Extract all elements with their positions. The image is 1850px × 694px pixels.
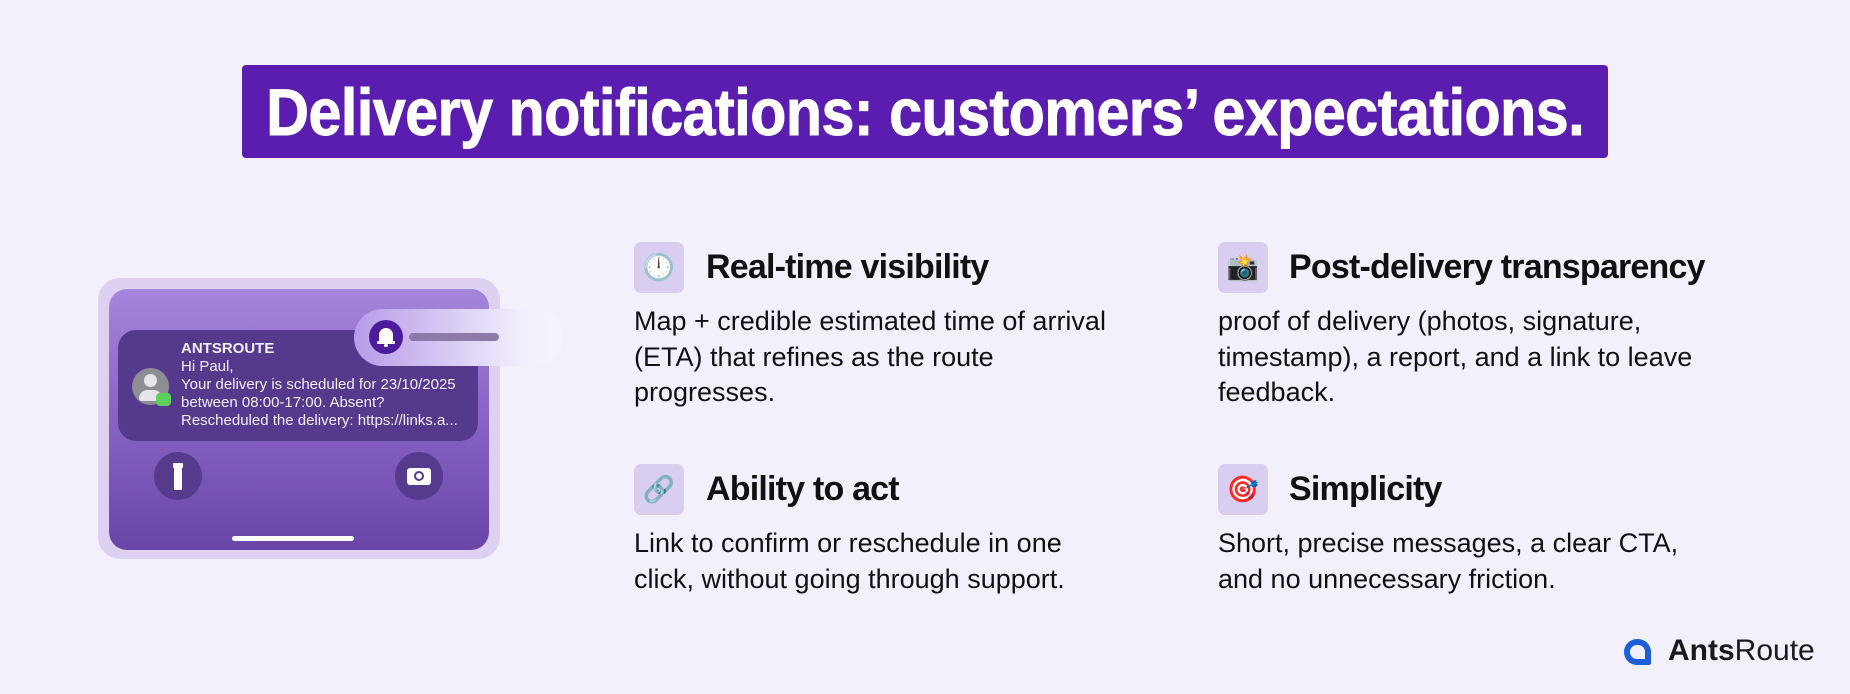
icon: bell	[369, 320, 403, 354]
body: and no unnecessary friction.	[1218, 564, 1556, 594]
icon: clock: 🕛	[643, 252, 675, 282]
body	[634, 306, 1106, 407]
icon: logo mark	[1624, 639, 1651, 665]
home bar	[232, 536, 354, 541]
body: progresses.	[634, 377, 775, 407]
notification text: between 08:00-17:00. Absent?	[181, 394, 384, 411]
icon: target	[1218, 464, 1268, 515]
logo: AntsRoute	[1668, 634, 1815, 667]
notification text: Rescheduled the delivery: https://links.a...	[181, 412, 458, 429]
body: feedback.	[1218, 377, 1335, 407]
notification text: Your delivery is scheduled for 23/10/2025	[181, 376, 456, 393]
item: ability to act	[634, 464, 1065, 594]
icon: target: 🎯	[1227, 474, 1259, 504]
bell pill	[354, 309, 563, 366]
body: Map + credible estimated time of arrival	[634, 306, 1106, 336]
notification text	[181, 340, 458, 429]
body	[1218, 528, 1678, 594]
heading: Post-delivery transparency	[1289, 248, 1705, 286]
phone illustration	[98, 278, 508, 559]
heading: Ability to act	[706, 470, 899, 508]
phone screen	[109, 289, 489, 550]
heading: Real-time visibility	[706, 248, 989, 286]
body	[1218, 306, 1692, 407]
body: timestamp), a report, and a link to leave	[1218, 342, 1692, 372]
icon: clock	[634, 242, 684, 293]
body: Link to confirm or reschedule in one	[634, 528, 1062, 558]
item: post-delivery transparency	[1218, 242, 1706, 407]
icon: link	[634, 464, 684, 515]
body	[634, 528, 1065, 594]
icon: link: 🔗	[643, 474, 675, 504]
heading: Simplicity	[1289, 470, 1442, 508]
body: Short, precise messages, a clear CTA,	[1218, 528, 1678, 558]
icon: camera	[395, 452, 443, 500]
item: real-time visibility	[634, 242, 1106, 407]
body: click, without going through support.	[634, 564, 1065, 594]
body: proof of delivery (photos, signature,	[1218, 306, 1641, 336]
avatar icon	[132, 368, 169, 405]
item: simplicity	[1218, 464, 1678, 594]
icon: camera flash: 📸	[1227, 252, 1259, 282]
icon: flashlight	[154, 452, 202, 500]
body: (ETA) that refines as the route	[634, 342, 994, 372]
notification card	[118, 330, 478, 441]
notification text: ANTSROUTE	[181, 340, 274, 357]
title: Delivery notifications: customers’ expectations.	[266, 74, 1584, 148]
notification text: Hi Paul,	[181, 358, 234, 375]
phone frame	[98, 278, 500, 559]
icon: camera flash	[1218, 242, 1268, 293]
